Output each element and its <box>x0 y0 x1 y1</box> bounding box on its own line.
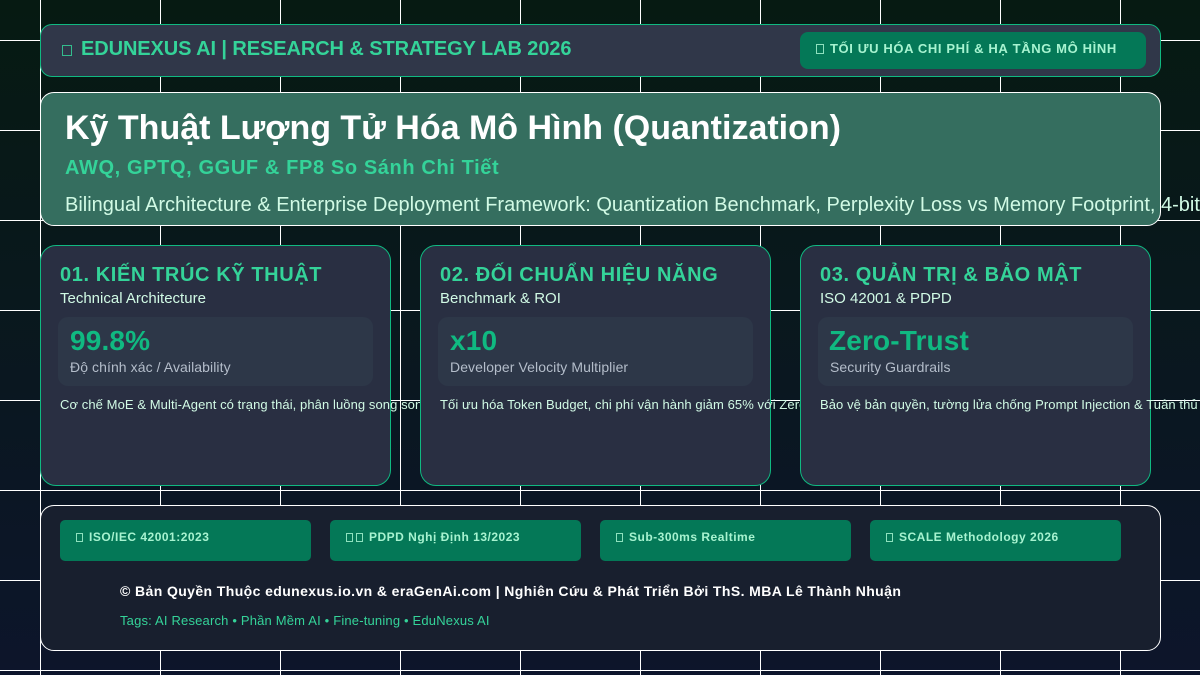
description: Bilingual Architecture & Enterprise Deployment Framework: Quantization Benchmark, Perplexity Loss vs Memory Footprint, 4-bit <box>65 194 1200 216</box>
badge: PDPD: PDPD Nghị Định 13/2023 <box>369 530 520 544</box>
copyright: © Bản Quyền Thuộc edunexus.io.vn & eraGenAi.com | Nghiên Cứu & Phát Triển Bởi ThS. MBA Lê Thành Nhuận <box>120 583 901 599</box>
metric box <box>58 317 373 386</box>
card description: Cơ chế MoE & Multi-Agent có trạng thái, phân luồng song song <box>60 397 430 412</box>
badge: methodology <box>870 520 1121 561</box>
badge: realtime: Sub-300ms Realtime <box>629 530 755 544</box>
card description: Tối ưu hóa Token Budget, chi phí vận hành giảm 65% với Zero-Trust <box>440 397 840 412</box>
main title: Kỹ Thuật Lượng Tử Hóa Mô Hình (Quantization) <box>65 109 841 147</box>
metric box <box>438 317 753 386</box>
metric box <box>818 317 1133 386</box>
card heading: 02. ĐỐI CHUẨN HIỆU NĂNG <box>440 264 718 286</box>
header bar <box>40 24 1161 77</box>
card heading: 01. KIẾN TRÚC KỸ THUẬT <box>60 264 322 286</box>
metric value: 99.8% <box>70 325 150 356</box>
metric label: Developer Velocity Multiplier <box>450 359 628 375</box>
card subheading: Benchmark & ROI <box>440 290 561 307</box>
hero panel <box>40 92 1161 226</box>
topic badge: TỐI ƯU HÓA CHI PHÍ & HẠ TẦNG MÔ HÌNH <box>830 41 1117 56</box>
badge: PDPD <box>330 520 581 561</box>
panel: governance and security <box>800 245 1151 486</box>
badge: ISO: ISO/IEC 42001:2023 <box>89 530 209 544</box>
badge: methodology: SCALE Methodology 2026 <box>899 530 1059 544</box>
metric value: Zero-Trust <box>829 325 969 356</box>
panel: technical architecture <box>40 245 391 486</box>
panel: benchmark and ROI <box>420 245 771 486</box>
card description: Bảo vệ bản quyền, tường lửa chống Prompt Injection & Tuân thủ <box>820 397 1198 412</box>
subtitle: AWQ, GPTQ, GGUF & FP8 So Sánh Chi Tiết <box>65 157 499 179</box>
tags: Tags: AI Research • Phần Mềm AI • Fine-tuning • EduNexus AI <box>120 613 490 628</box>
badge: ISO <box>60 520 311 561</box>
footer panel <box>40 505 1161 651</box>
badge: realtime <box>600 520 851 561</box>
metric label: Security Guardrails <box>830 359 951 375</box>
card heading: 03. QUẢN TRỊ & BẢO MẬT <box>820 264 1082 286</box>
card subheading: Technical Architecture <box>60 290 206 307</box>
metric label: Độ chính xác / Availability <box>70 359 231 375</box>
metric value: x10 <box>450 325 497 356</box>
topic badge <box>800 32 1146 69</box>
brand title: EDUNEXUS AI | RESEARCH & STRATEGY LAB 2026 <box>81 38 571 60</box>
card subheading: ISO 42001 & PDPD <box>820 290 952 307</box>
